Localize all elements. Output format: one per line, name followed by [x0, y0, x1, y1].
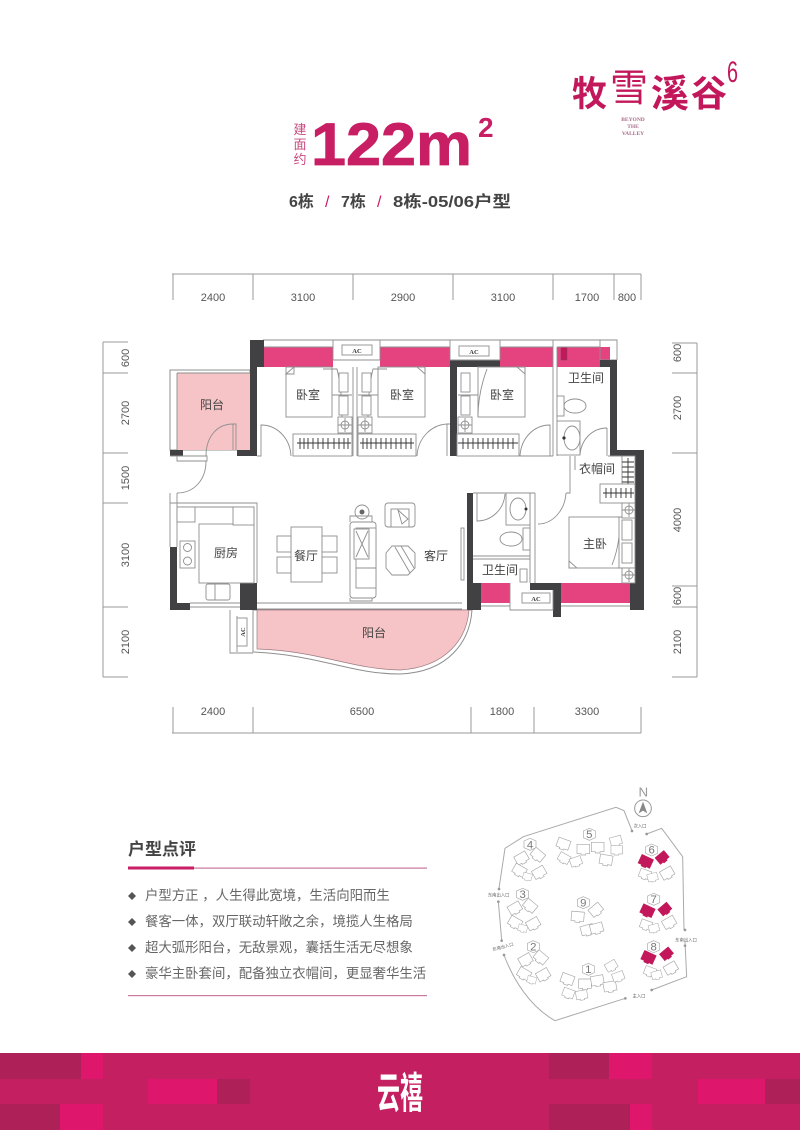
building 4: 4 — [527, 839, 533, 851]
top dimensions — [172, 274, 641, 304]
footer brand: 云禧: 云禧 — [377, 1071, 423, 1118]
compass — [635, 785, 651, 817]
bottom dimensions: 3300 — [575, 706, 599, 718]
building 2: 2 — [530, 941, 536, 953]
title: 建面约 122m2: 2 — [478, 112, 494, 143]
building 4 — [511, 838, 548, 882]
dining room: 餐厅 — [294, 548, 318, 563]
AC units: AC — [531, 596, 541, 603]
right dimensions — [672, 343, 697, 677]
bedroom 2: 卧室 — [390, 387, 414, 402]
building 3 — [507, 888, 542, 933]
top dimensions: 3100 — [291, 292, 315, 304]
building 9 — [571, 897, 604, 937]
top dimensions: 800 — [618, 292, 636, 304]
bedroom 3: 卧室 — [490, 387, 514, 402]
building 5: 5 — [586, 829, 592, 841]
building 7 highlighted — [639, 893, 678, 934]
right dimensions: 2700 — [672, 396, 684, 420]
left dimensions: 1500 — [120, 466, 132, 490]
site boundary and gates: 东南出入口 — [488, 892, 509, 899]
left dimensions: 600 — [120, 349, 132, 367]
review heading: 户型点评 — [128, 839, 196, 859]
subtitle: building and unit types: 7栋 — [341, 192, 366, 211]
logo: 牧雪溪谷: 雪 — [610, 68, 648, 110]
subtitle: building and unit types: 8栋-05/06户型 — [393, 192, 511, 211]
logo: 牧雪溪谷: BEYOND — [621, 117, 645, 123]
bottom dimensions — [172, 706, 641, 733]
review list: 超大弧形阳台，无敌景观，囊括生活无尽想象 — [145, 939, 413, 955]
logo: 牧雪溪谷: 谷 — [691, 73, 727, 114]
dining room — [277, 527, 337, 582]
logo: 牧雪溪谷: THE — [627, 124, 639, 130]
title: 建面约 122m2: 面 — [293, 137, 307, 152]
logo: 牧雪溪谷: VALLEY — [622, 131, 644, 137]
logo: 牧雪溪谷 — [572, 56, 738, 137]
bedroom 3 — [457, 367, 553, 456]
building 7 highlighted: 7 — [651, 894, 657, 906]
building 1: 1 — [585, 964, 591, 976]
top dimensions: 1700 — [575, 292, 599, 304]
review list: 餐客一体，双厅联动轩敞之余，境揽人生格局 — [145, 913, 413, 929]
compass: N — [639, 785, 648, 800]
kitchen — [170, 493, 257, 607]
floor plan — [170, 340, 644, 674]
review heading — [128, 839, 427, 870]
bathroom 2: 卫生间 — [482, 563, 518, 577]
logo: 牧雪溪谷: 牧 — [572, 75, 607, 114]
site plan — [488, 785, 697, 1021]
subtitle: building and unit types: / — [325, 194, 330, 211]
logo: 牧雪溪谷: 溪 — [651, 74, 689, 116]
title: 建面约 122m2: 建 — [293, 122, 307, 137]
AC units: AC — [352, 348, 362, 355]
pink window bands — [263, 340, 630, 606]
right dimensions: 2100 — [672, 630, 684, 654]
left dimensions — [103, 342, 132, 677]
bathroom 1: 卫生间 — [568, 371, 604, 385]
entrance door — [170, 456, 207, 493]
building 6 highlighted: 6 — [649, 845, 655, 857]
right dimensions: 600 — [672, 344, 684, 362]
review list: 豪华主卧套间，配备独立衣帽间，更显奢华生活 — [145, 965, 426, 981]
structural walls — [170, 340, 644, 617]
building 6 highlighted — [638, 844, 676, 883]
bottom dimensions: 2400 — [201, 706, 225, 718]
subtitle: building and unit types: / — [377, 194, 382, 211]
bedroom 1: 卧室 — [296, 387, 320, 402]
building 3: 3 — [520, 889, 526, 901]
building 8 highlighted: 8 — [651, 941, 657, 953]
AC units — [230, 340, 553, 653]
bottom dimensions: 6500 — [350, 706, 374, 718]
subtitle: building and unit types — [289, 192, 511, 211]
building 5 — [555, 828, 623, 868]
site boundary and gates: 主入口 — [633, 992, 645, 998]
building 8 highlighted — [640, 941, 679, 981]
living room — [257, 503, 464, 609]
AC units: AC — [469, 349, 479, 356]
left dimensions: 2100 — [120, 630, 132, 654]
kitchen: 厨房 — [214, 545, 238, 560]
review list — [128, 887, 427, 996]
balcony: curved south: 阳台 — [362, 625, 386, 640]
right dimensions: 4000 — [672, 508, 684, 532]
title: 建面约 122m2: 122m — [311, 111, 472, 178]
building 1 — [559, 959, 625, 1001]
site boundary and gates: 东南出入口 — [675, 937, 697, 944]
footer band — [0, 1053, 800, 1130]
top dimensions: 3100 — [491, 292, 515, 304]
top dimensions: 2900 — [391, 292, 415, 304]
bottom dimensions: 1800 — [490, 706, 514, 718]
bedroom 1 — [257, 367, 352, 456]
master bedroom — [538, 493, 635, 583]
master bedroom: 主卧 — [583, 537, 607, 551]
top dimensions: 2400 — [201, 292, 225, 304]
site boundary and gates: 东南出入口 — [492, 941, 514, 953]
logo: 牧雪溪谷: 6 — [727, 56, 738, 89]
balcony: curved south — [253, 610, 472, 674]
cloakroom — [566, 456, 635, 503]
cloakroom: 衣帽间 — [579, 461, 615, 476]
living room: 客厅 — [424, 548, 448, 563]
left dimensions: 3100 — [120, 543, 132, 567]
title: 建面约 122m2: 约 — [293, 152, 307, 167]
bathroom 1 — [553, 340, 607, 456]
site boundary and gates — [488, 807, 697, 1021]
subtitle: building and unit types: 6栋 — [289, 192, 314, 211]
bedroom 2 — [353, 367, 450, 456]
balcony: north-west: 阳台 — [200, 397, 224, 412]
left dimensions: 2700 — [120, 401, 132, 425]
building 9: 9 — [580, 897, 586, 909]
right dimensions: 600 — [672, 587, 684, 605]
bathroom 2 — [473, 493, 535, 583]
site boundary and gates: 次入口 — [634, 822, 646, 829]
review list: 户型方正 ，人生得此宽境，生活向阳而生 — [145, 887, 390, 903]
building 2 — [516, 941, 552, 985]
AC units: AC — [240, 627, 247, 637]
balcony: north-west — [170, 370, 250, 456]
